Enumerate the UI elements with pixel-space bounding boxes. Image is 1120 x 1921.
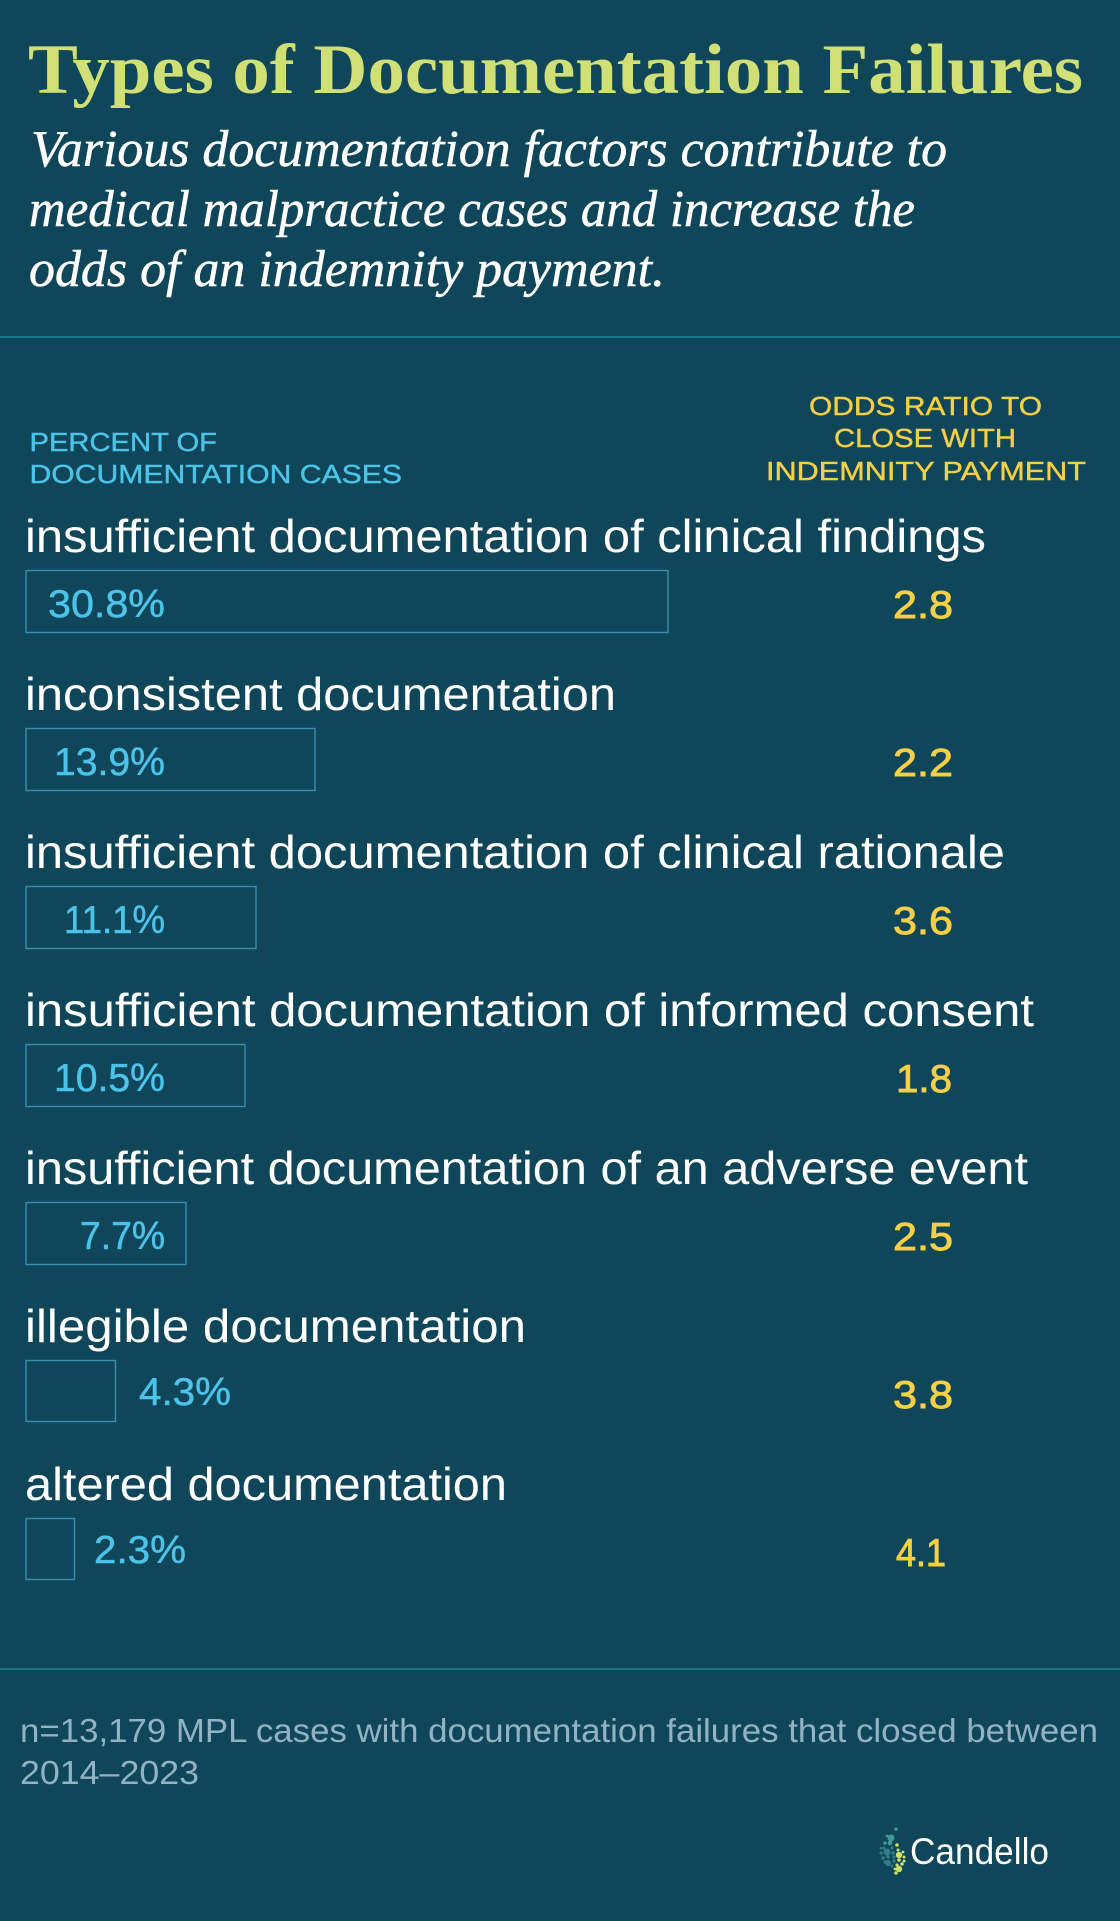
column heading: percent of documentation cases: PERCENT OF [30, 427, 217, 457]
column heading: percent of documentation cases [30, 427, 402, 489]
row: inconsistent documentation: inconsistent documentation [25, 668, 616, 720]
row: adverse event: 7.7% [80, 1215, 165, 1258]
row: adverse event [25, 1142, 1028, 1264]
row: altered documentation [25, 1458, 946, 1580]
row: clinical findings: insufficient documentation of clinical findings [25, 510, 986, 562]
row: inconsistent documentation: 2.2 [893, 742, 953, 785]
row: clinical findings: 30.8% [48, 583, 165, 626]
footnote [20, 1712, 1098, 1791]
row: clinical findings [25, 510, 986, 632]
column heading: odds ratio: INDEMNITY PAYMENT [766, 456, 1086, 486]
row: informed consent: 10.5% [54, 1057, 165, 1100]
row: clinical rationale: insufficient documentation of clinical rationale [25, 826, 1005, 878]
logo: Candello [879, 1827, 1049, 1875]
row: altered documentation: altered documentation [25, 1458, 507, 1510]
row: illegible documentation [25, 1300, 953, 1422]
row: clinical rationale: 11.1% [64, 899, 165, 942]
row: inconsistent documentation [25, 668, 953, 790]
row: adverse event: 2.5 [893, 1216, 953, 1259]
row: informed consent: insufficient documentation of informed consent [25, 984, 1034, 1036]
row: informed consent [25, 984, 1034, 1106]
title: Types of Documentation Failures [28, 31, 1083, 109]
subtitle: odds of an indemnity payment. [29, 241, 665, 298]
subtitle: Various documentation factors contribute to [31, 121, 947, 178]
row: adverse event: insufficient documentation of an adverse event [25, 1142, 1028, 1194]
footnote: 2014–2023 [20, 1754, 199, 1791]
subtitle: medical malpractice cases and increase the [29, 181, 915, 238]
icon: logo dots [879, 1827, 906, 1875]
row: informed consent: 1.8 [896, 1058, 952, 1101]
column heading: percent of documentation cases: DOCUMENTATION CASES [30, 459, 402, 489]
row: illegible documentation: illegible documentation [25, 1300, 526, 1352]
subtitle [29, 121, 947, 298]
row: illegible documentation: 3.8 [893, 1374, 953, 1417]
row: clinical rationale [25, 826, 1005, 948]
logo wordmark: Candello [910, 1831, 1049, 1872]
row: altered documentation: 2.3% [94, 1529, 186, 1572]
row: clinical rationale: 3.6 [893, 900, 953, 943]
row: inconsistent documentation: 13.9% [54, 741, 165, 784]
column heading: odds ratio: CLOSE WITH [834, 423, 1016, 453]
column heading: odds ratio: ODDS RATIO TO [809, 391, 1042, 421]
row: illegible documentation: 4.3% [139, 1371, 231, 1414]
row: altered documentation: 4.1 [896, 1532, 946, 1575]
row: clinical findings: 2.8 [893, 584, 953, 627]
column heading: odds ratio [766, 391, 1086, 486]
footnote: n=13,179 MPL cases with documentation failures that closed between [20, 1712, 1098, 1749]
